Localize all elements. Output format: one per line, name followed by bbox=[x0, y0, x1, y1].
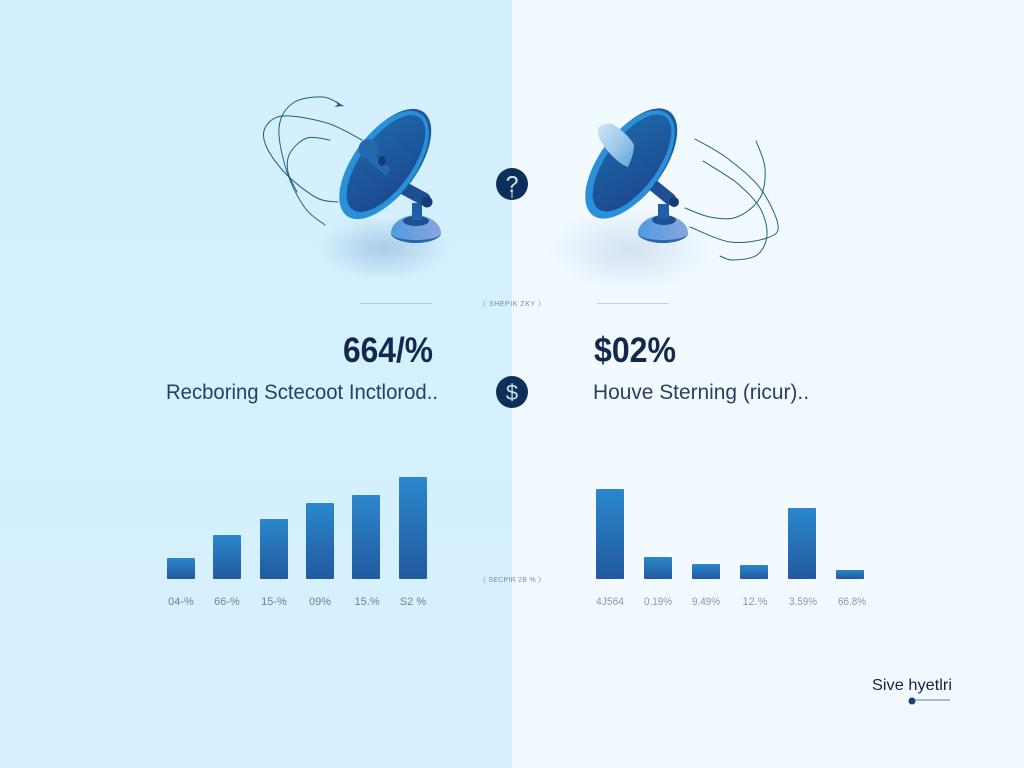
legend bbox=[872, 677, 952, 704]
heading: right statistic: $02% bbox=[594, 331, 676, 370]
icon: right satellite dish bbox=[546, 93, 778, 292]
bar chart: right bbox=[596, 489, 864, 579]
chart labels: left: 09% bbox=[309, 596, 331, 608]
icon: dollar badge bbox=[496, 376, 528, 408]
chart labels: right: 9.49% bbox=[692, 596, 720, 608]
chart labels: right: 4J564 bbox=[596, 596, 624, 608]
chart labels: left: S2 % bbox=[400, 596, 426, 608]
chart labels: left: 66-% bbox=[214, 596, 240, 608]
panel: left background bbox=[0, 0, 512, 768]
bar chart: left bbox=[167, 477, 427, 579]
heading: left statistic: 664/% bbox=[343, 331, 433, 370]
chart labels: left: 15.% bbox=[354, 596, 380, 608]
chart labels: right: 0.19% bbox=[644, 596, 672, 608]
panel: right background bbox=[512, 0, 1024, 768]
chart labels: left bbox=[168, 596, 426, 608]
icon: dollar badge: $ bbox=[506, 380, 518, 405]
text: right caption: Houve Sterning (ricur).. bbox=[593, 381, 809, 404]
chart labels: right bbox=[596, 596, 866, 608]
text: left caption: Recboring Sctecoot Inctlorod.. bbox=[166, 381, 438, 404]
chart labels: right: 12.% bbox=[742, 596, 768, 608]
label: upper divider: 〈 SHEPIK ZKY 〉 bbox=[479, 300, 545, 308]
legend: Sive hyetlri bbox=[872, 677, 952, 694]
label: lower divider: 〈 SECPIR 2B % 〉 bbox=[479, 576, 545, 584]
chart labels: left: 04-% bbox=[168, 596, 194, 608]
icon: left satellite dish bbox=[263, 94, 450, 280]
icon: question mark badge: ? bbox=[506, 171, 518, 197]
chart labels: right: 3.59% bbox=[789, 596, 817, 608]
chart labels: left: 15-% bbox=[261, 596, 287, 608]
icon: question mark badge bbox=[496, 168, 528, 200]
chart labels: right: 66.8% bbox=[838, 596, 866, 608]
